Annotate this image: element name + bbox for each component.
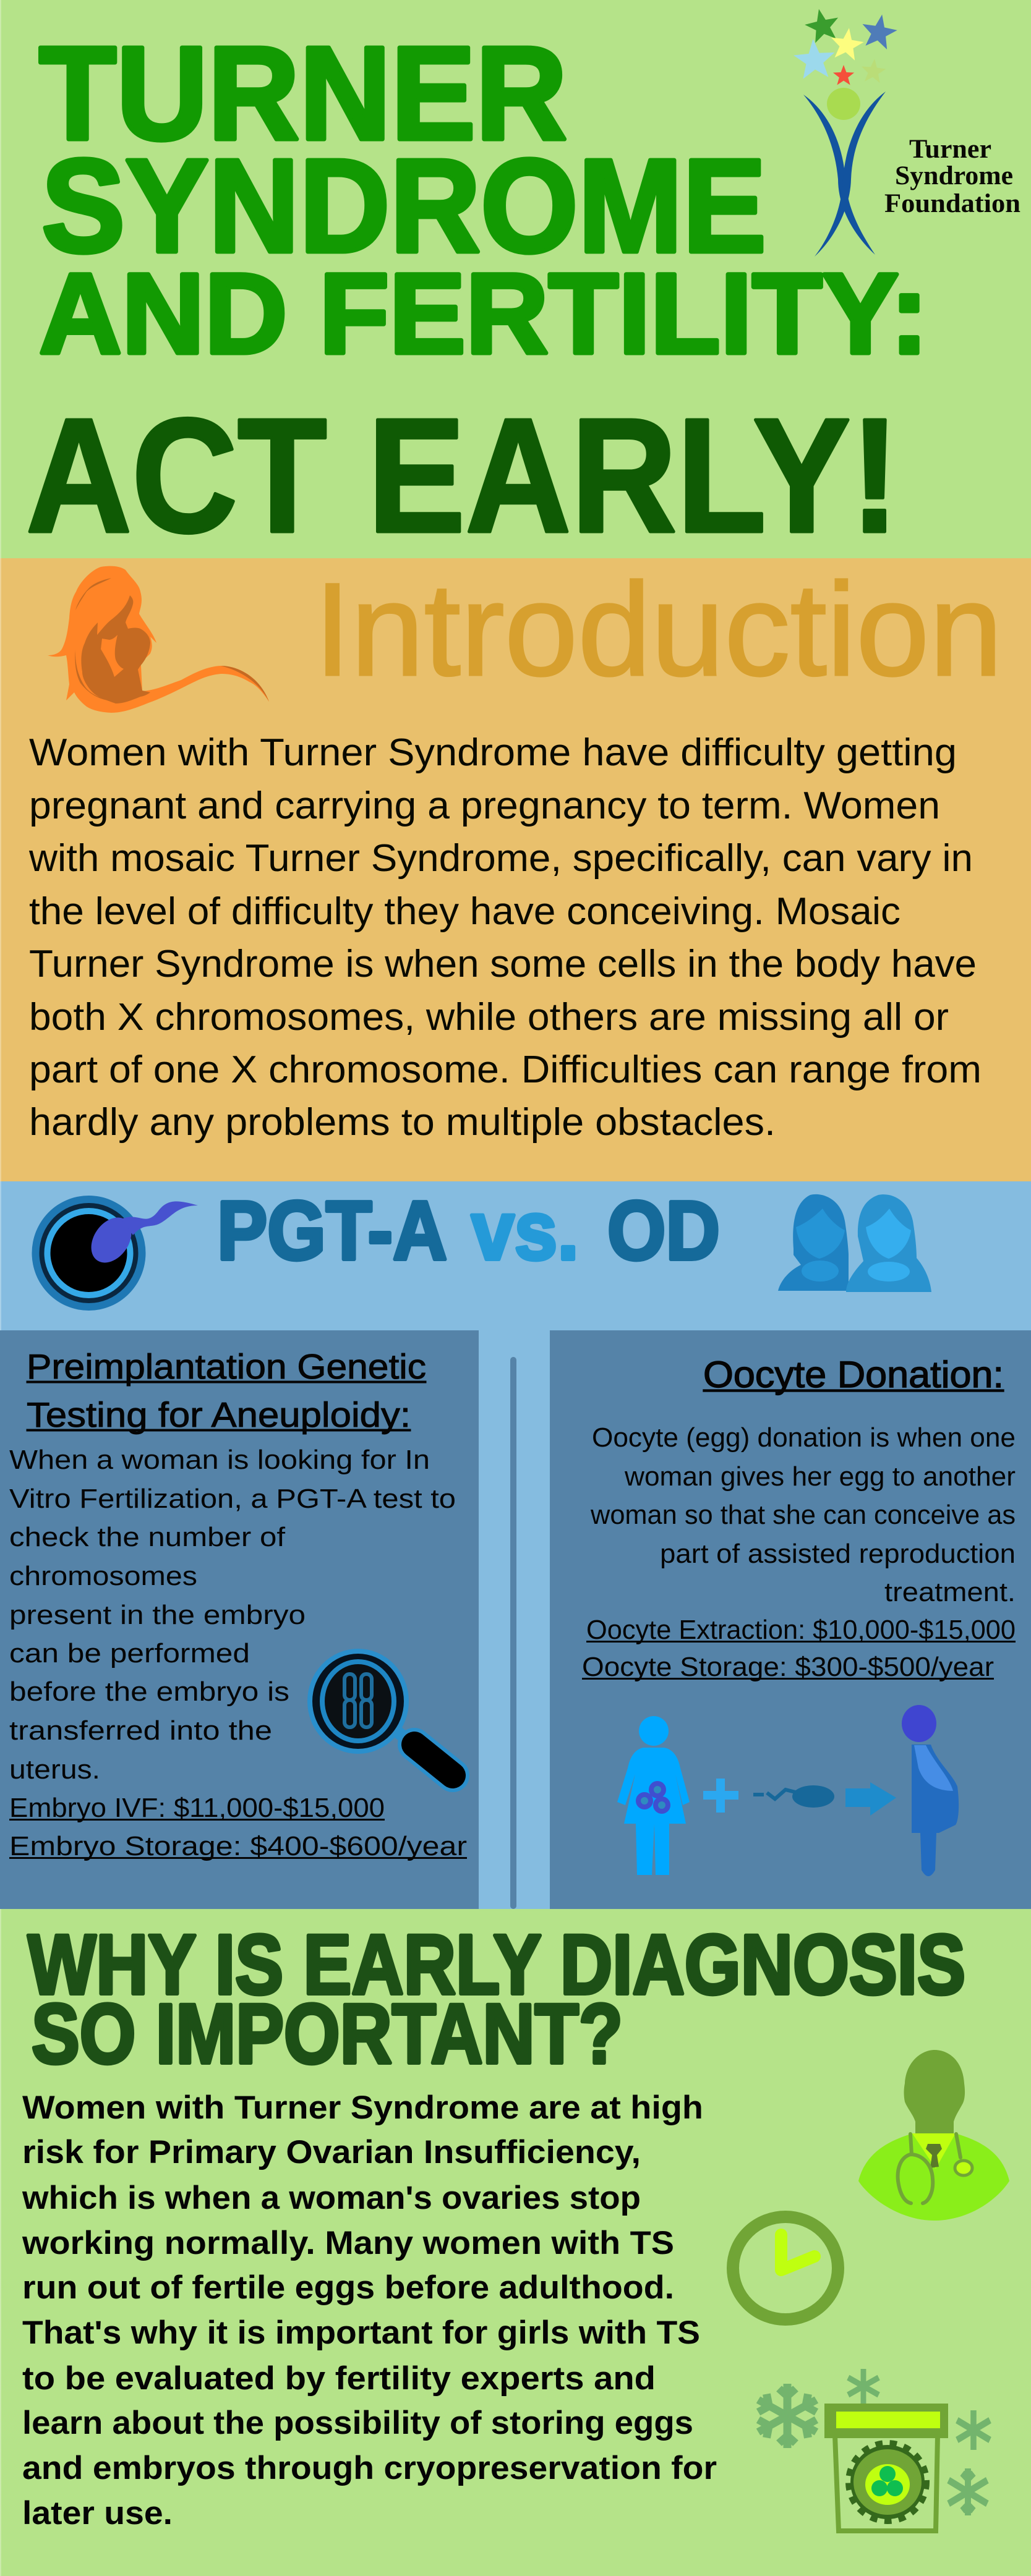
arrow [845, 1782, 896, 1816]
text block: PGT-A description: When a woman is looking for In [9, 1445, 430, 1475]
text block: early diagnosis body: which is when a woman's ovaries stop [22, 2180, 641, 2216]
heading: PGT-A vs. OD: OD [607, 1184, 720, 1277]
text block: oocyte description [590, 1422, 1016, 1607]
icon: mother and baby [48, 566, 269, 713]
icon: woman with ovaries [617, 1716, 690, 1875]
icon: clock [733, 2217, 838, 2319]
text block: PGT-A description: can be performed [9, 1638, 250, 1668]
heading: PGT-A vs. OD: vs. [471, 1184, 579, 1277]
text block: PGT-A costs [9, 1793, 467, 1861]
text block: oocyte description: treatment. [884, 1577, 1016, 1607]
title: Turner Syndrome and Fertility: AND FERTILITY: [39, 250, 928, 378]
text block: oocyte costs: Oocyte Extraction: $10,000-$15,000 [586, 1615, 1016, 1645]
text block: introduction body: part of one X chromosome. Difficulties can range from [29, 1048, 982, 1091]
title: Turner Syndrome and Fertility [39, 19, 928, 378]
text block: early diagnosis body: later use. [22, 2495, 173, 2531]
text block: oocyte description: woman gives her egg to another [624, 1461, 1016, 1492]
text block: introduction body: the level of difficulty they have conceiving. Mosaic [29, 890, 901, 933]
text block: PGT-A description: uterus. [9, 1754, 100, 1785]
text block: PGT-A description: transferred into the [9, 1715, 272, 1746]
text block: early diagnosis body: That's why it is important for girls with TS [22, 2315, 700, 2351]
text block: oocyte description: part of assisted reproduction [660, 1539, 1016, 1569]
logo: Turner Syndrome Foundation: Foundation [884, 189, 1020, 218]
icon: two women [778, 1194, 931, 1292]
panel: PGT-A [0, 1330, 479, 1909]
panel: Oocyte Donation [550, 1330, 1031, 1909]
text block: introduction body: both X chromosomes, while others are missing all or [29, 996, 949, 1039]
heading: Introduction: Introduction [314, 556, 1003, 704]
icon: cryopreservation jar with snowflakes [758, 2369, 990, 2531]
text block: introduction body: with mosaic Turner Syndrome, specifically, can vary in [28, 837, 973, 880]
text block: introduction body [28, 731, 982, 1144]
text block: early diagnosis body [22, 2089, 717, 2531]
icon: sperm [753, 1785, 834, 1808]
text block: PGT-A description: chromosomes [9, 1561, 197, 1591]
heading: Preimplantation Genetic Testing for Aneuploidy: Testing for Aneuploidy: [27, 1395, 411, 1435]
title: Turner Syndrome and Fertility: SYNDROME [41, 131, 766, 280]
text block: oocyte costs: Oocyte Storage: $300-$500/year [582, 1652, 994, 1682]
text block: introduction body: hardly any problems to multiple obstacles. [29, 1101, 776, 1144]
heading: Why is early diagnosis so important [28, 1918, 965, 2081]
text block: PGT-A description [9, 1445, 456, 1785]
text block: PGT-A costs: Embryo IVF: $11,000-$15,000 [9, 1793, 385, 1823]
text block: PGT-A costs: Embryo Storage: $400-$600/year [9, 1831, 467, 1861]
text block: introduction body: Turner Syndrome is when some cells in the body have [29, 943, 977, 985]
icon: sperm and egg [32, 1196, 198, 1311]
text block: early diagnosis body: risk for Primary Ovarian Insufficiency, [22, 2134, 641, 2170]
text block: early diagnosis body: and embryos through cryopreservation for [22, 2450, 717, 2486]
text block: early diagnosis body: run out of fertile eggs before adulthood. [22, 2269, 674, 2306]
text block: early diagnosis body: Women with Turner Syndrome are at high [22, 2089, 703, 2126]
text block: early diagnosis body: learn about the possibility of storing eggs [22, 2405, 693, 2441]
text block: early diagnosis body: working normally. Many women with TS [22, 2225, 674, 2261]
text block: introduction body: pregnant and carrying a pregnancy to term. Women [29, 784, 940, 827]
text block: PGT-A description: present in the embryo [9, 1600, 306, 1630]
logo: Turner Syndrome Foundation [792, 6, 1020, 257]
icon: plus [703, 1779, 738, 1813]
heading: Oocyte Donation: Oocyte Donation: [703, 1354, 1004, 1395]
icon: pregnant woman [902, 1705, 959, 1876]
text block: PGT-A description: check the number of [9, 1522, 286, 1552]
text block: introduction body: Women with Turner Syndrome have difficulty getting [29, 731, 957, 774]
logo: Turner Syndrome Foundation: Turner [909, 135, 991, 164]
heading: Why is early diagnosis so important: SO IMPORTANT? [32, 1987, 623, 2081]
text block: PGT-A description: before the embryo is [9, 1677, 289, 1707]
heading: Preimplantation Genetic Testing for Aneuploidy: Preimplantation Genetic [27, 1347, 426, 1387]
text block: PGT-A description: Vitro Fertilization, a PGT-A test to [9, 1484, 456, 1514]
heading: PGT-A vs. OD: PGT-A [217, 1184, 447, 1277]
heading: Preimplantation Genetic Testing for Aneuploidy [27, 1347, 426, 1435]
text block: oocyte costs [582, 1615, 1016, 1682]
heading: PGT-A vs. OD [217, 1184, 720, 1277]
text block: oocyte description: Oocyte (egg) donation is when one [592, 1422, 1016, 1453]
icon: doctor [858, 2050, 1009, 2221]
title: Turner Syndrome and Fertility: TURNER [39, 19, 567, 168]
text block: oocyte description: woman so that she can conceive as [590, 1500, 1016, 1530]
icon: magnifying glass with chromosomes [307, 1649, 453, 1775]
logo: Turner Syndrome Foundation: Syndrome [895, 161, 1013, 190]
text block: early diagnosis body: to be evaluated by fertility experts and [22, 2360, 656, 2397]
heading: Act Early: ACT EARLY! [26, 385, 899, 566]
